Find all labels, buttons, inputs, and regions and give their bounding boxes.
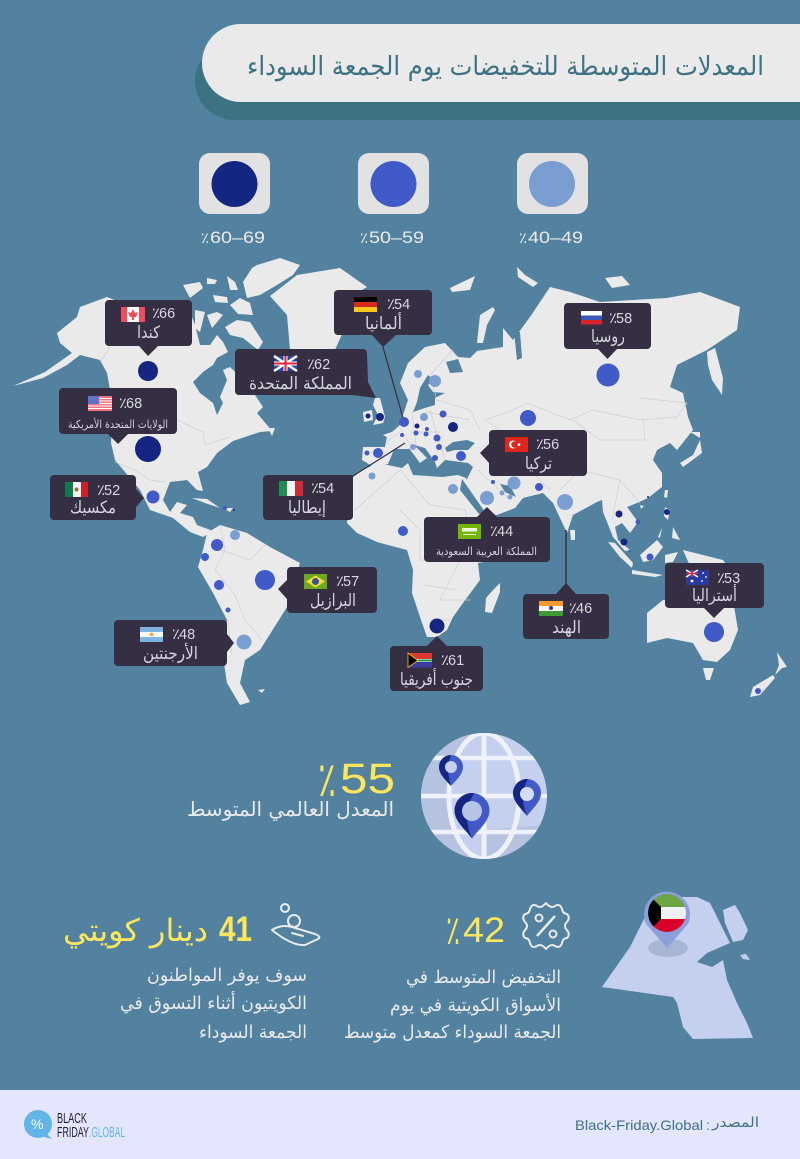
callout: USA 68: 68 <box>126 396 142 412</box>
callout: Italy 54 <box>263 475 353 520</box>
pin small <box>439 755 463 786</box>
Kuwait average discount stat: التخفيض المتوسط في <box>406 967 561 988</box>
callout: Germany 54 <box>334 290 432 347</box>
legend: 60-69 percent: 60–69 <box>210 228 265 247</box>
callout: Saudi Arabia 44 <box>424 507 550 562</box>
pin large <box>454 793 490 838</box>
data dots <box>135 361 761 694</box>
legend: 60-69 percent: ٪ <box>201 230 209 247</box>
legend: 50-59 percent: 50–59 <box>369 228 424 247</box>
source: Black-Friday.Global <box>575 1117 703 1133</box>
callout: Germany 54: 54 <box>394 297 410 313</box>
map of Kuwait with flag pin <box>602 892 753 1039</box>
savings stat: دينار كويتي <box>63 913 208 949</box>
callout: United Kingdom 62 <box>235 349 376 398</box>
title banner <box>195 24 800 120</box>
callout: Argentina 48: الأرجنتين <box>143 643 198 664</box>
callout: India 46: الهند <box>552 618 581 638</box>
logo: .GLOBAL <box>89 1124 125 1141</box>
legend: 40-49 percent: 40–49 <box>528 228 583 247</box>
callout: Brazil 57 <box>278 567 377 613</box>
savings stat: الكويتيون أثناء التسوق في <box>120 991 307 1014</box>
callout: Canada 66 <box>105 300 192 356</box>
callout: United Kingdom 62: ٪ <box>307 355 315 373</box>
callout: Russia 58: روسيا <box>591 327 625 347</box>
callout: Italy 54: إيطاليا <box>288 498 326 518</box>
global average stat: 55 <box>340 755 395 803</box>
callout: Germany 54: ألمانيا <box>365 312 402 334</box>
callout: USA 68: الولايات المتحدة الأمريكية <box>68 417 168 431</box>
legend: 50-59 percent <box>358 153 429 247</box>
callout: Canada 66: ٪ <box>152 304 160 322</box>
callout: Canada 66: 66 <box>159 306 175 322</box>
water bodies <box>413 332 698 514</box>
callout: India 46 <box>523 583 609 639</box>
Kuwait average discount stat: الأسواق الكويتية في يوم <box>390 994 561 1016</box>
legend: 60-69 percent <box>199 153 270 247</box>
savings hand icon <box>272 904 319 945</box>
source <box>575 1115 759 1133</box>
callout: Russia 58: 58 <box>616 311 632 327</box>
callout: Australia 53: أستراليا <box>692 584 737 606</box>
Kuwait average discount stat: الجمعة السوداء كمعدل متوسط <box>344 1022 561 1043</box>
callout: South Africa 61: ٪ <box>441 651 449 669</box>
callout: Russia 58: ٪ <box>609 309 617 327</box>
callout: Mexico 52 <box>50 475 144 520</box>
callout: Brazil 57: ٪ <box>336 572 344 590</box>
callout: Australia 53 <box>665 563 764 618</box>
Kuwait average discount stat: ٪ <box>446 909 460 953</box>
callout: India 46: 46 <box>576 601 592 617</box>
callout: India 46: ٪ <box>569 599 577 617</box>
world map <box>13 258 787 705</box>
callout: Argentina 48: 48 <box>179 627 195 643</box>
pin right <box>513 779 541 816</box>
globe icon with pins <box>421 733 547 859</box>
savings stat: سوف يوفر المواطنون <box>147 965 307 986</box>
callout: South Africa 61: 61 <box>448 653 464 669</box>
callout: Italy 54: ٪ <box>311 479 319 497</box>
discount badge icon <box>523 903 569 949</box>
source: : <box>706 1117 710 1133</box>
global average stat: ٪ <box>318 754 336 807</box>
callout: Brazil 57: 57 <box>343 574 359 590</box>
callout: Australia 53: 53 <box>724 571 740 587</box>
savings stat: الجمعة السوداء <box>199 1022 307 1043</box>
callout: Turkey 56: 56 <box>543 437 559 453</box>
savings stat <box>63 910 307 1043</box>
legend: 50-59 percent: ٪ <box>360 230 368 247</box>
legend: 40-49 percent <box>517 153 588 247</box>
legend: 40-49 percent: ٪ <box>519 230 527 247</box>
savings stat: 41 <box>219 910 252 949</box>
callout: Italy 54: 54 <box>318 481 334 497</box>
callout: Argentina 48 <box>114 620 234 666</box>
callout: Brazil 57: البرازيل <box>310 591 356 611</box>
logo <box>24 1110 125 1141</box>
connector lines <box>353 347 566 585</box>
title banner: المعدلات المتوسطة للتخفيضات يوم الجمعة السوداء <box>247 52 764 82</box>
logo: FRIDAY <box>57 1124 89 1141</box>
Kuwait average discount stat <box>344 909 561 1043</box>
global average stat: المعدل العالمي المتوسط <box>187 797 394 822</box>
callout: Mexico 52: ٪ <box>97 481 105 499</box>
callout: South Africa 61: جنوب أفريقيا <box>400 668 473 690</box>
Kuwait average discount stat: 42 <box>463 911 505 950</box>
callout: Saudi Arabia 44: المملكة العربية السعودية <box>436 545 537 558</box>
callout: Mexico 52: 52 <box>104 483 120 499</box>
callout: Canada 66: كندا <box>137 323 161 343</box>
callout: Australia 53: ٪ <box>717 569 725 587</box>
callout: USA 68: ٪ <box>119 394 127 412</box>
callout: Turkey 56 <box>480 430 587 476</box>
callout: South Africa 61 <box>390 636 483 691</box>
logo: % <box>31 1116 43 1132</box>
callout: United Kingdom 62: 62 <box>314 357 330 373</box>
callout: Russia 58 <box>564 303 651 359</box>
callout: USA 68 <box>59 388 177 444</box>
callout: Saudi Arabia 44: 44 <box>497 524 513 540</box>
global average stat <box>187 754 395 822</box>
callout: United Kingdom 62: المملكة المتحدة <box>249 374 352 394</box>
callout: Mexico 52: مكسيك <box>70 498 116 518</box>
callout: Turkey 56: ٪ <box>536 435 544 453</box>
callout: Argentina 48: ٪ <box>172 625 180 643</box>
callout: Saudi Arabia 44: ٪ <box>490 522 498 540</box>
footer band <box>0 1090 800 1159</box>
logo: BLACK <box>57 1110 87 1127</box>
callout: Germany 54: ٪ <box>387 295 395 313</box>
callout: Turkey 56: تركيا <box>525 454 552 474</box>
source: المصدر <box>711 1115 759 1131</box>
